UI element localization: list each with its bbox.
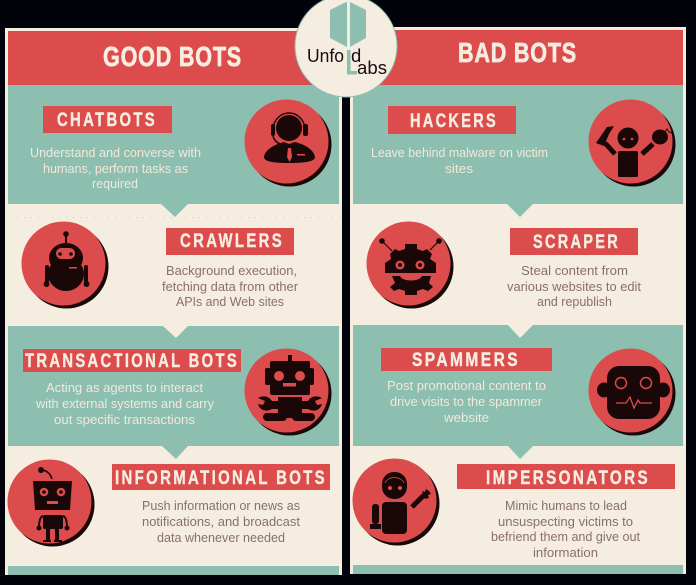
section: informational bots: Push information or news as [142,498,300,513]
icon: round crawler robot [22,222,108,308]
section: chatbots: required [92,176,138,191]
logo: Unfold Labs: d [351,45,361,66]
section: impersonators: IMPERSONATORS [486,468,650,489]
logo: Unfold Labs [295,0,397,97]
heading: bad bots [353,30,683,85]
section: impersonators: information [533,545,598,560]
section: transactional bots: Acting as agents to interact [46,380,203,395]
section: spammers: Post promotional content to [387,378,546,393]
section: chatbots: Understand and converse with [30,145,201,160]
section: spammers: website [443,410,489,425]
section: chatbots [8,85,339,217]
section: informational bots: data whenever needed [157,530,285,545]
section: informational bots: INFORMATIONAL BOTS [115,468,327,489]
heading: good bots: GOOD BOTS [103,41,242,72]
section: scraper: various websites to edit [507,279,641,294]
section: spammers: drive visits to the spammer [390,394,543,409]
icon: boxy antenna robot [8,460,94,546]
section: crawlers: fetching data from other [162,279,299,294]
heading: good bots [8,31,339,85]
logo: Unfold Labs: abs [357,57,387,78]
icon: hacker with hammer and torch [588,100,676,186]
section: scraper: and republish [537,294,612,309]
section: impersonators: unsuspecting victims to [498,514,633,529]
section: transactional bots: TRANSACTIONAL BOTS [25,351,239,372]
section: impersonators [352,458,675,560]
section: crawlers: CRAWLERS [180,231,284,252]
icon: square robot with wrenches [244,348,332,436]
section: informational bots [8,460,330,546]
section: hackers: Leave behind malware on victim [371,145,548,160]
logo mark: teal hexagon [330,2,366,47]
section: impersonators: Mimic humans to lead [505,498,627,513]
section: hackers [353,85,683,217]
section: chatbots: CHATBOTS [57,110,157,131]
section: chatbots: humans, perform tasks as [43,161,188,176]
icon: support agent with headset [244,100,332,186]
section: impersonators: befriend them and give out [491,529,640,544]
section: crawlers: Background execution, [166,263,297,278]
icon: spam robot face [588,348,676,436]
section: hackers: sites [445,161,474,176]
icon: impersonator robot with wrench [352,458,440,546]
section: informational bots: notifications, and broadcast [142,514,300,529]
heading: bad bots: BAD BOTS [458,37,577,68]
section: scraper: Steal content from [521,263,628,278]
section: transactional bots [8,326,339,459]
panel: good bots [5,28,342,575]
section: scraper [366,222,641,309]
section: scraper: SCRAPER [533,232,620,253]
section: spammers [353,325,683,459]
section: transactional bots: with external systems and carry [35,396,214,411]
panel: bad bots [350,27,686,574]
section: crawlers: APIs and Web sites [176,294,284,309]
section: transactional bots: out specific transactions [54,412,196,427]
icon: gear robot [366,222,454,308]
logo: Unfold Labs: Unfo [307,45,344,66]
section: crawlers [22,222,299,309]
section: spammers: SPAMMERS [412,350,520,371]
section: hackers: HACKERS [410,111,498,132]
